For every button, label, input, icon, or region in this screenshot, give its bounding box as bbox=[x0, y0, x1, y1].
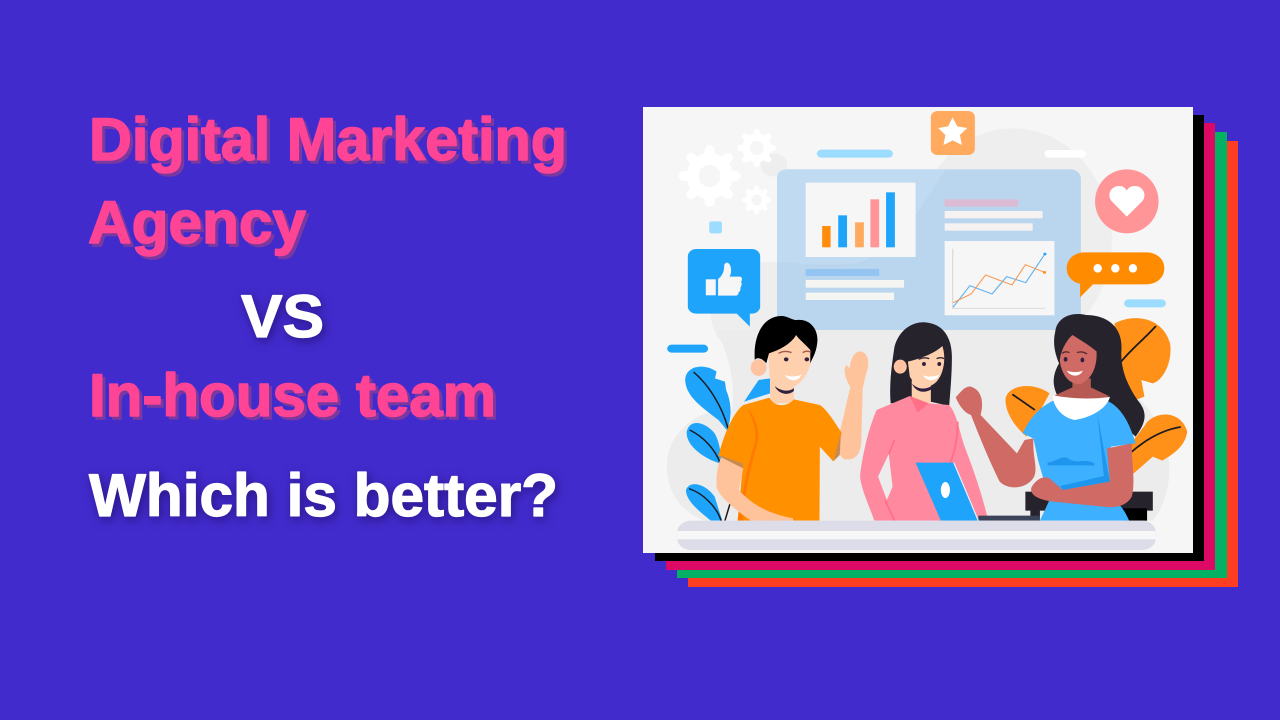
heading: Which is better?: Which is better? bbox=[89, 462, 558, 529]
leaf: lower right bbox=[1126, 415, 1187, 475]
layer: red bbox=[688, 141, 1238, 587]
small square bbox=[709, 221, 722, 233]
shirt bbox=[718, 398, 842, 521]
dress bbox=[1023, 400, 1136, 521]
layer: black bbox=[655, 115, 1204, 561]
layer: green bbox=[677, 132, 1227, 578]
chair bbox=[1025, 492, 1153, 521]
pill: white top bbox=[1045, 150, 1086, 158]
stacked card layers bbox=[655, 115, 1238, 587]
title block bbox=[88, 106, 567, 529]
icon: heart bbox=[1095, 169, 1159, 233]
gear: medium bbox=[741, 132, 773, 164]
person: woman in pink shirt bbox=[860, 322, 987, 521]
leaf: top right bbox=[1115, 318, 1171, 400]
collar bbox=[1053, 395, 1110, 420]
ear bbox=[751, 359, 767, 376]
leaf: top bbox=[685, 367, 770, 431]
facial features bbox=[779, 351, 811, 380]
text lines right bbox=[945, 199, 1043, 231]
face bbox=[908, 346, 944, 387]
hair bbox=[755, 316, 817, 363]
neck bbox=[770, 378, 794, 403]
line chart bbox=[945, 241, 1054, 315]
illustration card bbox=[643, 107, 1193, 553]
left arm bbox=[716, 457, 793, 521]
hair bbox=[890, 322, 952, 406]
leaf: middle left bbox=[1005, 386, 1049, 437]
dashboard panel bbox=[777, 169, 1081, 330]
shirt bbox=[860, 396, 987, 521]
face bbox=[768, 335, 811, 388]
background blob behind team bbox=[667, 330, 1169, 521]
leaf: middle bbox=[687, 423, 721, 464]
gears bbox=[684, 132, 773, 212]
layer: crimson bbox=[666, 123, 1215, 570]
icon: chat bubble bbox=[1067, 252, 1164, 297]
icon: thumbs up bbox=[688, 249, 760, 327]
text lines left bbox=[806, 269, 904, 300]
facial features bbox=[1062, 352, 1087, 376]
lower illustration: team of three bbox=[667, 314, 1187, 550]
raised arm bbox=[839, 351, 868, 460]
leaf: bottom bbox=[686, 484, 730, 521]
raised fist arm bbox=[956, 386, 1036, 487]
neck bbox=[912, 380, 931, 403]
collar shadow bbox=[912, 383, 932, 392]
icon: star badge bbox=[931, 111, 975, 155]
desk bbox=[677, 521, 1156, 550]
forearm bbox=[1031, 443, 1133, 507]
gear: small bbox=[745, 188, 769, 212]
orange leaves bbox=[1005, 318, 1187, 475]
blue leaves bbox=[685, 367, 770, 521]
pill: blue left bbox=[667, 345, 708, 353]
pill: light blue top bbox=[817, 150, 893, 158]
heading: Digital Marketing: Digital Marketing bbox=[89, 106, 567, 173]
neck and chest bbox=[1053, 378, 1109, 415]
heading: VS: VS bbox=[241, 283, 324, 350]
gear: large bbox=[684, 150, 736, 202]
bar chart bbox=[806, 183, 916, 257]
person: man in orange shirt bbox=[716, 316, 868, 521]
upper illustration: dashboard and icons bbox=[688, 111, 1166, 365]
ear bbox=[894, 360, 907, 374]
face bbox=[1060, 335, 1097, 384]
background blobs bbox=[711, 128, 1112, 365]
hair bbox=[1054, 314, 1145, 437]
collar shadow bbox=[775, 386, 794, 394]
laptop bbox=[916, 463, 1040, 521]
person: woman in blue dress bbox=[956, 314, 1145, 521]
pill: light blue right bbox=[1124, 299, 1166, 307]
heading: Agency: Agency bbox=[88, 189, 307, 256]
heading: In-house team: In-house team bbox=[89, 362, 496, 429]
facial features bbox=[919, 358, 944, 380]
